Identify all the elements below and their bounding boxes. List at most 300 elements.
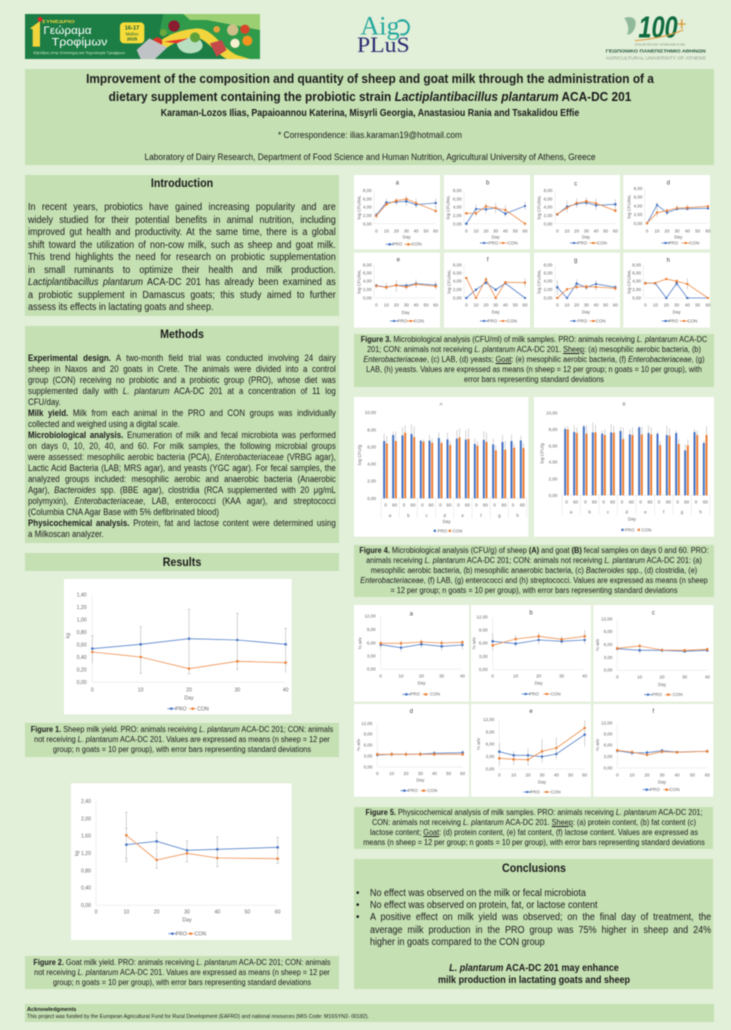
chart: 3f: f	[487, 257, 489, 263]
chart: 5f: 50	[690, 773, 695, 778]
chart: 4A sheep: c	[426, 513, 429, 518]
text: introduction body: assess its effects in lactating goats and sheep.	[28, 302, 213, 313]
chart: 3b: 30	[493, 228, 499, 233]
chart: 5e: Day	[538, 779, 547, 784]
chart: 4B goat: 0	[602, 500, 605, 505]
chart: 3f: 50	[513, 303, 518, 308]
heading: methods: Methods	[160, 328, 204, 341]
chart: 3e: 40	[413, 303, 419, 308]
panel: results heading	[25, 553, 339, 571]
text: methods body	[27, 352, 336, 540]
caption: figure 5: means (n sheep = 12 per group; n goats = 10 per group), with error bars representing standard deviations	[363, 838, 704, 847]
chart: figure 1 sheep milk yield	[64, 578, 292, 715]
chart: 3b: 10	[473, 228, 479, 233]
chart: 5b: 40	[582, 674, 588, 679]
chart: 3b: 8,00	[453, 188, 462, 193]
logo: Agricultural University of Athens 100 years	[605, 10, 706, 60]
chart: 5d: 40	[432, 771, 437, 776]
chart: 5e: 30	[539, 773, 545, 778]
chart: 3a: 10	[384, 228, 389, 233]
chart: 3e: 30	[404, 303, 409, 308]
chart: 4B goat: 8,00	[549, 427, 558, 432]
chart: 3a: 2,00	[363, 213, 372, 218]
chart: 3a: Day	[403, 234, 411, 239]
chart: 3c: 30	[584, 228, 589, 233]
chart: 3a: 4,00	[363, 205, 372, 210]
chart: 3b: log CFU/mL	[446, 195, 451, 219]
chart: 3a: a	[396, 180, 400, 186]
chart: 3h: CON	[687, 318, 697, 323]
chart: 5c: 6,00	[604, 642, 613, 647]
chart: 3b: 2,00	[453, 213, 462, 218]
chart: 3e: 0	[375, 303, 378, 308]
caption: figure 2: group; n goats = 10 per group), with error bars representing standard deviations	[53, 978, 311, 987]
chart: 3g: 6,00	[544, 271, 553, 276]
chart group: figure 4 fecal microbiology bars	[354, 396, 714, 537]
chart: 5c: 40	[705, 674, 710, 679]
chart: 4B goat: 6,00	[549, 443, 558, 448]
chart: 3f: 20	[483, 303, 489, 308]
chart: 4A sheep: 0	[439, 503, 442, 508]
chart: figure 2 goat milk yield: 1,20	[81, 851, 91, 857]
logo: AigPLuS: PLuS	[357, 32, 410, 57]
chart: 5a: 40	[460, 673, 465, 678]
chart: figure 1 sheep milk yield: 10	[138, 688, 144, 694]
logo: conference banner: Εξελίξεις στην Επιστήμη και Τεχνολογία Τροφίμων	[33, 51, 125, 55]
chart: 5a: Day	[418, 681, 426, 686]
chart: 5e: 50	[568, 773, 574, 778]
chart: 5b: b	[529, 610, 533, 616]
text: conclusions list	[370, 888, 712, 948]
chart: 4B goat: e	[644, 510, 647, 515]
logo: conference banner: 16-17	[125, 25, 139, 31]
chart: 3f: 8,00	[453, 262, 462, 267]
chart: 3f: Day	[492, 309, 500, 314]
title: Improvement of the composition and quantity of sheep and goat milk through the administration of a	[86, 71, 653, 86]
chart: 3f: 60	[522, 303, 528, 308]
chart: 5f: 12,00	[601, 720, 613, 725]
chart: 3a: 30	[404, 228, 409, 233]
chart: 4B goat: 2,00	[549, 476, 558, 481]
chart: figure 2 goat milk yield: 2,40	[81, 799, 91, 805]
chart: figure 2 goat milk yield: CON	[195, 931, 206, 937]
chart: 5c: 0,00	[604, 668, 613, 673]
chart: 3h: 6,00	[632, 271, 641, 276]
chart: 4B goat: c	[607, 510, 610, 515]
text: conclusions list: average milk production in the PRO group was 75% higher in sheep and 24%	[370, 925, 711, 936]
chart: 3h: 50	[695, 303, 701, 308]
chart: 3g: g	[574, 258, 577, 264]
logo: conference banner: Γεώραμα	[43, 25, 92, 37]
chart: 3e: 0,00	[363, 296, 372, 301]
chart: 4B goat: Day	[628, 516, 637, 521]
chart: 4B goat: 60	[703, 500, 708, 505]
chart: 3d: 30	[674, 228, 680, 233]
chart: figure 1 sheep milk yield: Day	[184, 696, 194, 702]
panel: introduction	[25, 175, 339, 316]
chart: figure 1 sheep milk yield: CON	[197, 706, 209, 712]
chart: 3d	[623, 175, 711, 249]
chart: 4B goat: 0,00	[549, 493, 558, 498]
chart: 3g: 20	[574, 303, 580, 308]
chart: 3h: 10	[653, 303, 658, 308]
chart: 3b: 6,00	[453, 196, 462, 201]
chart: 3a: 0	[375, 228, 378, 233]
text: methods body: (Columbia CNA Agar Base with 5% defibrinated blood)	[28, 506, 219, 516]
caption: figure 4	[354, 545, 714, 597]
chart: 4B goat: 10,00	[546, 410, 558, 415]
chart: 5b: Day	[535, 681, 543, 686]
chart: 5d: 60	[460, 771, 466, 776]
chart: 3g: 40	[593, 303, 599, 308]
chart: 5d: 10	[389, 771, 395, 776]
chart: 5c: 30	[682, 674, 688, 679]
chart: 3d: 60	[705, 228, 711, 233]
text: acknowledgments	[26, 1006, 369, 1020]
chart: 5d: d	[410, 709, 413, 715]
chart: 5e: e	[529, 709, 533, 715]
chart: 3g: 0,00	[544, 296, 553, 301]
chart: 4A sheep: 60	[410, 503, 416, 508]
chart: 3c: 4,00	[544, 205, 553, 210]
chart: 3f: 2,00	[453, 287, 462, 292]
chart: figure 2 goat milk yield: 0,80	[81, 868, 91, 874]
chart: 3d: Day	[674, 235, 683, 240]
chart: 3f: log CFU/mL	[446, 269, 451, 294]
chart: 5e: 3,00	[486, 754, 495, 759]
chart: 5d	[354, 704, 469, 797]
text: introduction body: a probiotic supplement in Damascus goats; this study aimed to further	[28, 290, 336, 300]
chart: 5a: a	[410, 611, 414, 617]
text: conclusions list: higher in goats compared to the CON group	[370, 937, 545, 948]
chart: 4A sheep: 60	[520, 503, 525, 508]
chart: 3a: PRO	[392, 242, 403, 247]
chart: 3b: 50	[513, 228, 518, 233]
caption: figure 1	[25, 723, 339, 757]
chart: figure 2 goat milk yield: kg	[74, 850, 80, 856]
chart: 4A sheep: a	[389, 513, 392, 518]
chart: 4A sheep: 60	[483, 503, 488, 508]
chart: 3b: 0,00	[453, 221, 462, 226]
chart: 5b: 3,00	[479, 654, 488, 659]
chart: 5e: % w/v	[476, 737, 481, 750]
chart: 5f: PRO	[650, 787, 660, 792]
caption: figure 2: Figure 2. Goat milk yield. PRO: animals receiving L. plantarum ACA-DC 201; CON: animals	[33, 958, 331, 967]
chart: 4B goat: 60	[684, 500, 690, 505]
chart: 5a: 30	[439, 673, 445, 678]
chart: 5f: 6,00	[604, 743, 613, 748]
title	[86, 71, 654, 104]
chart: 4A sheep: 60	[428, 503, 434, 508]
chart: 5e: 12,00	[483, 717, 495, 722]
chart: 4B goat	[534, 397, 714, 537]
text: conclusions list: A positive effect on milk yield was observed; on the final day of treatment, the	[370, 912, 711, 923]
chart: 3h: 4,00	[632, 279, 641, 284]
chart: figure 1 sheep milk yield: 0,20	[77, 667, 87, 673]
chart: 3d: d	[667, 180, 670, 186]
chart: figure 1 sheep milk yield: 0,80	[77, 630, 87, 636]
chart: figure 1 sheep milk yield: 1,40	[77, 593, 87, 599]
text: methods body: sheep in Naxos and 20 goats in Crete. The animals were divided into a control	[28, 364, 336, 374]
chart: figure 1 sheep milk yield: 0,60	[77, 642, 87, 648]
chart: 3h: PRO	[668, 318, 679, 323]
heading: introduction: Introduction	[151, 177, 213, 190]
logo: AigPLuS	[357, 12, 411, 57]
chart: 4A sheep: g	[498, 513, 501, 518]
chart: 3c: 8,00	[544, 188, 553, 193]
chart: 4B goat: b	[588, 510, 591, 515]
chart: 5f: CON	[670, 787, 680, 792]
text: introduction body: This trend highlights the need for research on probiotic supplementation	[28, 252, 336, 263]
affiliation: Laboratory of Dairy Research, Department of Food Science and Human Nutrition, Agricultural University of Athens, Greece	[144, 152, 595, 162]
chart: 5c: 12,00	[601, 616, 613, 621]
text: methods body: analyzed groups included: mesophilic aerobic and anaerobic bacteria (Anaerobic	[28, 474, 336, 484]
chart: 3d: 10	[654, 228, 660, 233]
chart: 3c: 0	[556, 228, 559, 233]
chart: 4B goat: h	[699, 510, 702, 515]
chart: 4B goat: 60	[573, 500, 579, 505]
chart: 5f	[593, 704, 713, 797]
chart group: figure 3 milk microbiology	[354, 174, 711, 328]
chart: 5a: CON	[430, 692, 440, 697]
caption: figure 3: 201; CON: animals not receiving L. plantarum ACA-DC 201. Sheep: (a) mesophilic aerobic bacteria, (b)	[367, 345, 701, 354]
chart: 3b: 60	[522, 228, 528, 233]
caption: figure 3: Enterobacteriaceae, (c) LAB, (d) yeasts; Goat: (e) mesophilic aerobic bacteria, (f) Enterobacteriaceae, (g)	[363, 355, 705, 364]
chart: figure 2 goat milk yield: 0,40	[81, 886, 91, 892]
chart: 5b: 0	[491, 674, 494, 679]
chart: 3f: 0	[465, 303, 468, 308]
chart: 3a: 20	[394, 228, 399, 233]
chart: figure 1 sheep milk yield: 0,00	[77, 680, 87, 686]
chart: figure 1 sheep milk yield: 30	[234, 688, 240, 694]
chart: 3g: PRO	[577, 318, 588, 323]
chart: 3a: 0,00	[363, 221, 372, 226]
chart: 5b: 20	[536, 674, 542, 679]
chart group: figure 5 physicochemical	[354, 604, 714, 797]
chart: 3e: CON	[414, 318, 424, 323]
chart: 3f: 0,00	[453, 296, 462, 301]
chart: 3h: 2,00	[632, 287, 641, 292]
chart: 5d: 20	[403, 771, 409, 776]
chart: 3f: 40	[503, 303, 508, 308]
text: introduction body: Lactiplantibacillus plantarum ACA-DC 201 has already been examined as	[28, 277, 336, 288]
logo: conference banner: 2025	[127, 37, 138, 42]
authors: Karaman-Lozos Ilias, Papaioannou Katerina, Misyrli Georgia, Anastasiou Rania and Tsakalidou Effie	[160, 108, 579, 119]
chart: 5d: Day	[416, 777, 425, 782]
caption: figure 3: Figure 3. Microbiological analysis (CFU/ml) of milk samples. PRO: animals receiving L. plantarum ACA-DC	[361, 335, 707, 344]
chart: 3h: 40	[685, 303, 690, 308]
chart: figure 2 goat milk yield: 1,60	[81, 834, 91, 840]
chart: figure 2 goat milk yield: 2,00	[81, 816, 91, 822]
chart: figure 1 sheep milk yield: 1,20	[77, 605, 87, 611]
chart: 5b: 12,00	[476, 615, 488, 620]
panel: conclusions	[354, 859, 713, 989]
caption: figure 1: not receiving L. plantarum ACA-DC 201. Values are expressed as means (n sheep = 12 per	[34, 735, 330, 744]
panel: methods	[25, 326, 339, 543]
chart: 3g: 30	[584, 303, 589, 308]
logo: Agricultural University of Athens 100 years: AGRICULTURAL UNIVERSITY OF ATHENS	[606, 55, 706, 60]
chart: 4B goat: 0	[621, 500, 624, 505]
logo: Agricultural University of Athens 100 years: ΓΕΩΠΟΝΙΚΟ ΠΑΝΕΠΙΣΤΗΜΙΟ ΑΘΗΝΩΝ	[606, 49, 706, 54]
text: methods body: collected and weighed using a digital scale.	[28, 418, 180, 428]
chart: 3h: 60	[705, 303, 711, 308]
chart: 3c: c	[574, 181, 577, 187]
chart: 3f: CON	[507, 318, 517, 323]
chart: 4B goat: 0	[565, 500, 568, 505]
chart: 4A sheep: A	[439, 401, 443, 406]
bullet markers	[356, 888, 360, 923]
text: introduction body: improved gut health and productivity. At the same time, there is a global	[28, 227, 336, 238]
logo: Agricultural University of Athens 100 years: ΕΤΟΣ ΙΔΡΥΣΗΣ 1920 · ESTABLISHED IN 1920	[635, 43, 686, 46]
chart: 5e: 0	[498, 773, 501, 778]
chart: 3b: 40	[503, 228, 508, 233]
chart: 5a: % w/v	[357, 637, 362, 649]
chart: 3e: e	[397, 257, 401, 263]
chart: 4A sheep: 60	[392, 503, 398, 508]
chart: 3a: log CFU/mL	[356, 195, 361, 219]
chart: 5b: 30	[559, 674, 565, 679]
chart: 5a: 0	[379, 673, 382, 678]
chart: 5c: Day	[658, 682, 667, 687]
chart: 3h: 20	[664, 303, 669, 308]
chart: 4A sheep: b	[407, 513, 410, 518]
chart: 3e: 4,00	[363, 279, 372, 284]
bullet markers: •	[356, 888, 359, 898]
text: introduction body: shift toward the utilization of non-cow milk, such as sheep and goat milk.	[28, 240, 336, 250]
chart: 4B goat: 60	[647, 500, 653, 505]
chart: 5f: 20	[644, 773, 650, 778]
chart: 3a: 60	[433, 228, 439, 233]
chart: 3c: 6,00	[544, 196, 553, 201]
chart: 5a: 9,00	[367, 627, 376, 632]
chart: figure 2 goat milk yield: 30	[184, 910, 190, 916]
chart: 5d: 50	[446, 771, 452, 776]
chart: 5a: 20	[419, 673, 424, 678]
caption: figure 1: Figure 1. Sheep milk yield. PRO: animals receiving L. plantarum ACA-DC 201; CON: animals	[31, 725, 333, 734]
chart: 5e: CON	[551, 789, 561, 794]
chart: figure 2 goat milk yield: 10	[123, 910, 129, 916]
chart: 3d: PRO	[668, 240, 679, 245]
chart: 3e: log CFU/mL	[356, 269, 361, 294]
caption: figure 4: Figure 4. Microbiological analysis (CFU/g) of sheep (A) and goat (B) fecal samples on days 0 and 60. PRO:	[359, 546, 709, 555]
heading: results: Results	[163, 556, 201, 568]
chart: 5a: 12,00	[364, 614, 376, 619]
chart: 5d: 3,00	[364, 753, 373, 758]
chart: 5e: 9,00	[486, 729, 495, 734]
chart: 5c: 0	[616, 674, 619, 679]
panel: acknowledgments	[25, 1004, 714, 1022]
chart: 3c: 60	[613, 228, 618, 233]
heading: conclusions: Conclusions	[501, 862, 565, 875]
text: introduction body	[27, 202, 336, 313]
chart: 5d: % w/v	[356, 738, 361, 751]
chart: 5a: 6,00	[367, 640, 376, 645]
chart: figure 2 goat milk yield: PRO	[176, 931, 187, 937]
chart: 3f: 10	[473, 303, 479, 308]
chart: 4A sheep: PRO	[437, 528, 448, 533]
text: acknowledgments: This project was funded by the European Agricultural Fund for Rural Development (EAFRD) and national resources (MIS Code: M16SYN2- 00182).	[27, 1014, 369, 1020]
text: methods body: group (CON) receiving no probiotic and a probiotic group (PRO), whose diet was	[28, 374, 336, 384]
chart: 4B goat: 4,00	[549, 460, 558, 465]
chart: 3a	[354, 175, 440, 249]
chart: 4A sheep: 0	[475, 503, 478, 508]
chart: 3e: 6,00	[363, 271, 372, 276]
chart: 4B goat: a	[570, 510, 573, 515]
text: methods body: Milk yield. Milk from each animal in the PRO and CON groups was individually	[28, 408, 336, 418]
chart: 5d: 0,00	[364, 764, 373, 769]
chart: 4A sheep: 0	[457, 503, 460, 508]
text: methods body: Experimental design. A two-month field trial was conducted involving 24 dairy	[28, 352, 336, 362]
chart: 4A sheep: 10,00	[365, 410, 376, 415]
chart: 5b: CON	[551, 691, 561, 696]
chart: 5b: 10	[513, 674, 519, 679]
chart: 5f: Day	[658, 780, 667, 785]
chart: 4A sheep: e	[461, 513, 464, 518]
text: methods body: polymyxin), Enterobacteriaceae, LAB, enterococci (KAA agar), and streptococci	[28, 496, 336, 506]
chart: 3g: CON	[596, 318, 606, 323]
text: introduction body: In recent years, probiotics have gained increasing popularity and are	[28, 202, 336, 213]
text: introduction body: in small ruminants to optimize their health and milk production.	[28, 264, 336, 276]
chart: 4A sheep: f	[480, 513, 482, 518]
chart: 3d: 40	[685, 228, 690, 233]
chart: 4B goat: g	[681, 510, 684, 515]
chart: 3f: PRO	[487, 318, 498, 323]
chart: 5d: 9,00	[364, 732, 373, 737]
chart: 3c: Day	[582, 234, 591, 239]
chart: 3b: 20	[483, 228, 489, 233]
chart: 5f: 60	[705, 773, 710, 778]
chart: 4A sheep: 0	[512, 503, 515, 508]
chart: figure 2 goat milk yield: 60	[275, 910, 281, 916]
logo: AigPLuS: Aig	[360, 12, 400, 41]
text: acknowledgments: Acknowledgments	[27, 1006, 76, 1012]
chart: 5b: 6,00	[479, 641, 488, 646]
chart: 4A sheep: 60	[501, 503, 507, 508]
chart: 3a: 6,00	[363, 196, 372, 201]
chart: 5d: CON	[427, 788, 437, 793]
chart: 3g: 0	[556, 303, 559, 308]
chart: 4A sheep: Day	[443, 519, 451, 524]
chart: 3d: 8,00	[634, 186, 643, 191]
text: methods body: Physicochemical analysis. Protein, fat and lactose content were determined using	[28, 518, 336, 528]
chart: 4A sheep: 2,00	[367, 479, 376, 484]
chart: 3d: 20	[664, 228, 670, 233]
chart: 4B goat: 0	[639, 500, 642, 505]
chart: 5c: 3,00	[604, 655, 613, 660]
chart: 5c: % w/v	[595, 638, 600, 651]
chart: figure 2 goat milk yield: 0	[95, 910, 98, 916]
chart: 5a	[354, 605, 469, 702]
chart: 3d: 6,00	[634, 195, 643, 200]
text: take-home message: milk production in lactating goats and sheep	[437, 975, 630, 986]
chart: 3e: 8,00	[363, 262, 372, 267]
logo: conference banner	[24, 13, 261, 60]
chart: 4B goat: log CFU/g	[540, 443, 545, 463]
chart: 5c: 9,00	[604, 629, 613, 634]
chart: 3g: 50	[603, 303, 609, 308]
chart: 3e	[354, 253, 440, 328]
text: methods body: CFU/day.	[28, 396, 61, 406]
chart: figure 2 goat milk yield: 20	[154, 910, 160, 916]
chart: 5d: 30	[418, 771, 423, 776]
chart: 3b: CON	[508, 240, 518, 245]
caption: figure 5: Figure 5. Physicochemical analysis of milk samples. PRO: animals receiving L. plantarum ACA-DC 201;	[365, 808, 702, 817]
chart: 3g: 60	[613, 303, 618, 308]
chart: 4B goat: d	[625, 510, 628, 515]
chart: 4A sheep: 8,00	[367, 427, 376, 432]
chart: 4B goat: 0	[584, 500, 587, 505]
caption: figure 4: Enterobacteriaceae, (f) LAB, (g) enterococci and (h) streptococci. Values are expressed as means (n sheep	[360, 576, 708, 585]
